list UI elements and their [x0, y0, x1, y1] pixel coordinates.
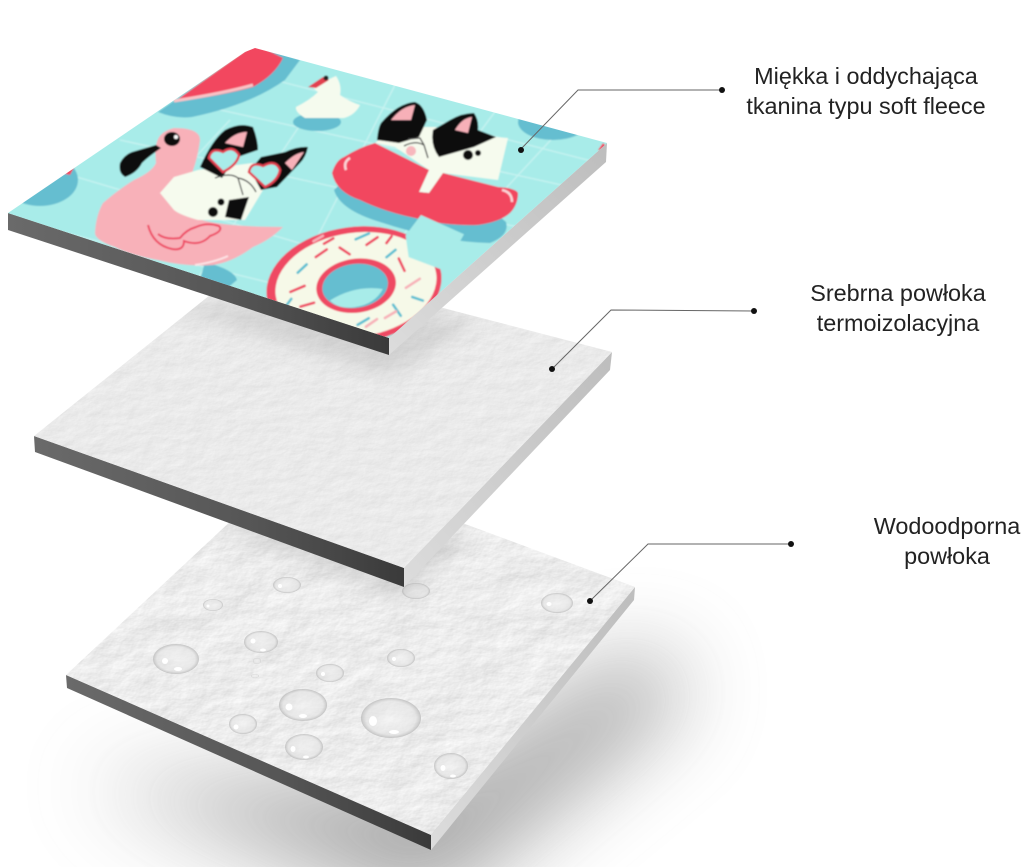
layer 1: soft fleece fabric — [0, 40, 620, 360]
leader line 1 — [518, 87, 725, 153]
layer 2 top surface — [34, 296, 612, 568]
label 3: powłoka — [904, 543, 991, 569]
callout: silver coating — [549, 280, 987, 372]
layer 1 front edge — [8, 213, 389, 355]
dog with heart glasses — [160, 125, 308, 220]
layer 3: waterproof coating — [66, 523, 635, 850]
red ring float — [332, 143, 518, 225]
shadow of layer 1 on layer 2 — [188, 299, 468, 378]
layer 1 printed pattern — [8, 48, 607, 338]
label 3: Wodoodporna — [874, 513, 1021, 539]
layer 3 front edge — [66, 675, 431, 850]
leader line 3 — [587, 541, 794, 604]
layer 2: silver thermal coating — [34, 296, 612, 587]
label 1: tkanina typu soft fleece — [746, 93, 986, 119]
donut float — [266, 214, 464, 338]
shadow of layer 2 on layer 3 — [224, 524, 463, 601]
red ring float shadow — [334, 186, 508, 244]
dog in red ring — [375, 102, 508, 193]
callout: soft fleece — [518, 63, 986, 153]
label 2: termoizolacyjna — [817, 310, 980, 336]
flamingo float — [200, 264, 238, 286]
layer 3 top surface — [66, 523, 634, 835]
layer 1 side edge — [389, 143, 607, 355]
label 1: Miękka i oddychająca — [754, 63, 979, 89]
watermelon float — [158, 45, 300, 117]
swan float — [293, 113, 341, 131]
layer 2 side edge — [404, 352, 612, 587]
floor shadow — [80, 650, 690, 867]
layer 2 front edge — [34, 436, 404, 587]
water droplets — [153, 577, 573, 779]
layer 3 side edge — [431, 587, 635, 850]
label 2: Srebrna powłoka — [810, 280, 987, 306]
pool grid — [70, 81, 588, 283]
callout: waterproof coating — [587, 513, 1021, 604]
corner floats — [518, 119, 578, 141]
leader line 2 — [549, 308, 757, 372]
